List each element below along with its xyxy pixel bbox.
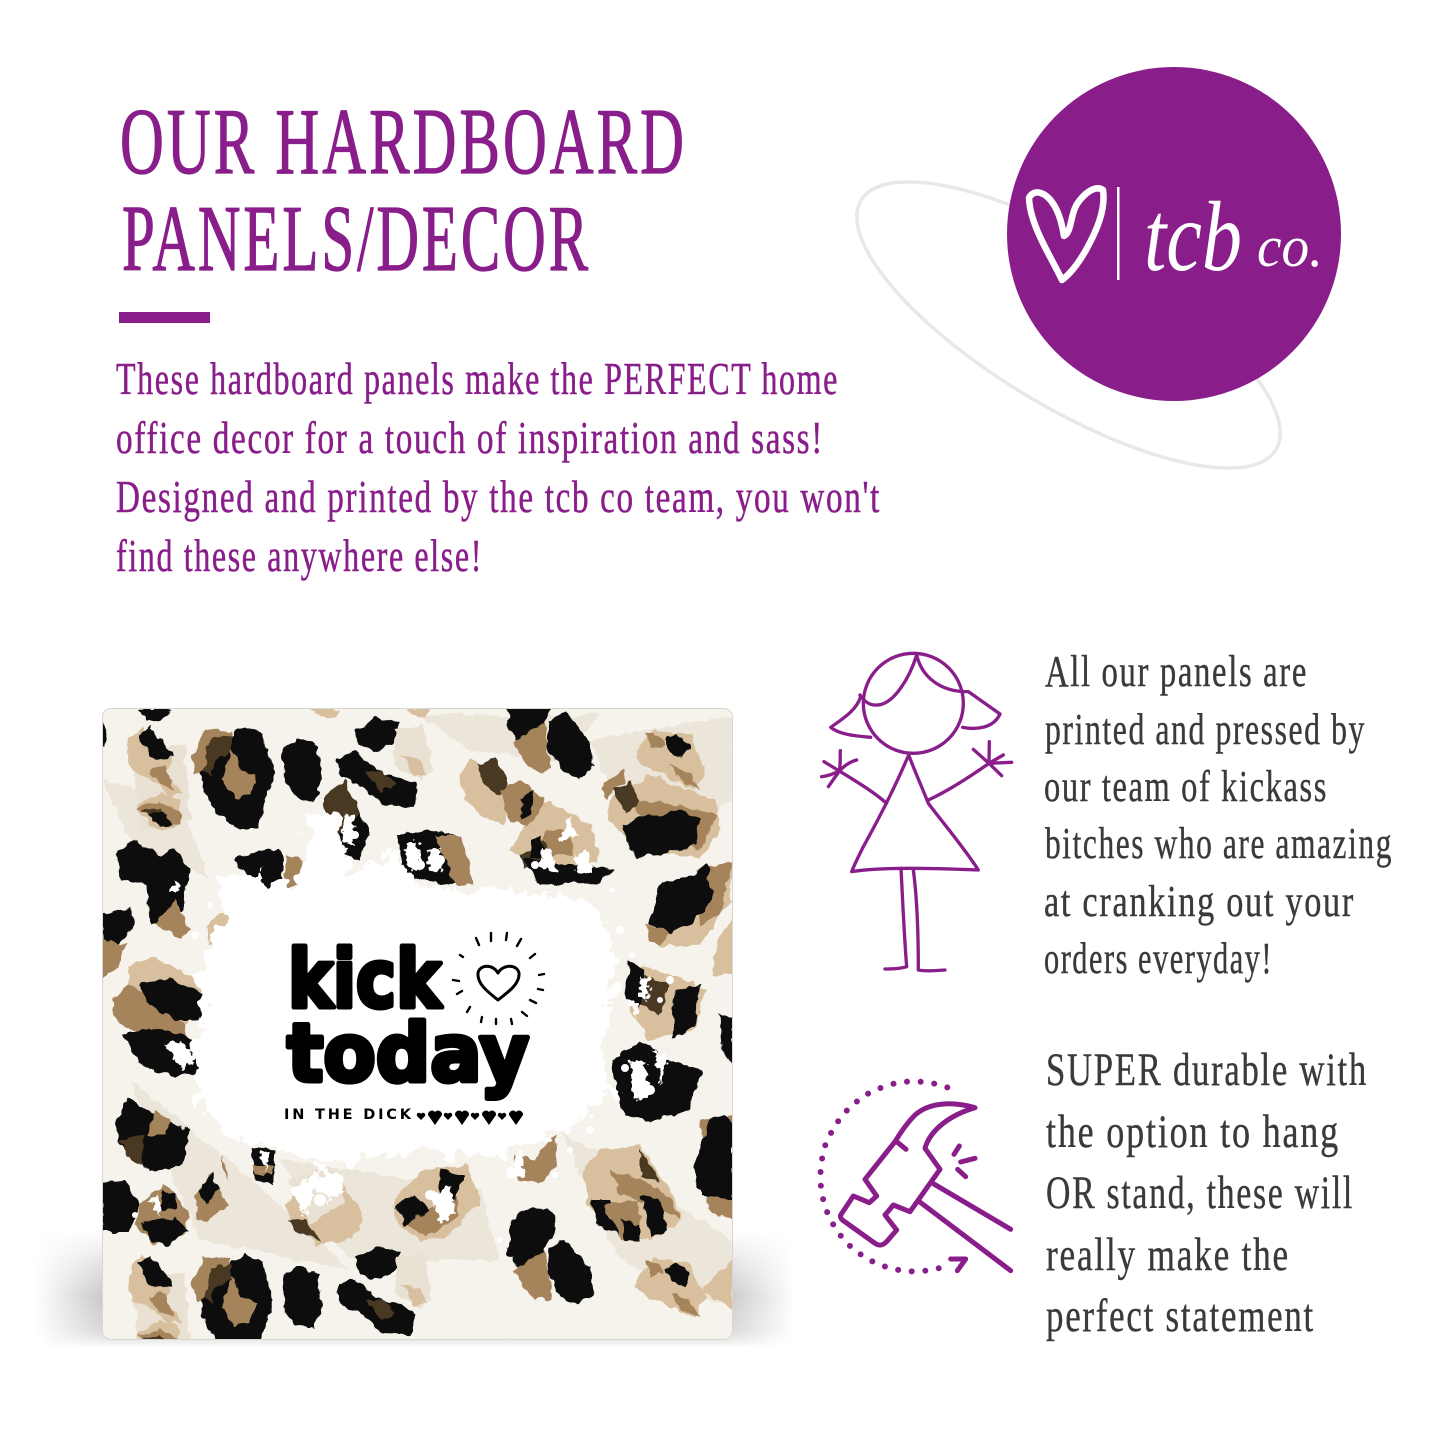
intro paragraph: find these anywhere else! — [116, 530, 483, 581]
title underline — [119, 312, 210, 323]
logo divider — [1117, 187, 1120, 280]
intro paragraph: These hardboard panels make the PERFECT home — [116, 353, 839, 404]
panel edge vignette — [102, 708, 733, 1340]
text block: printed and pressed: our team of kickass — [1044, 762, 1328, 811]
title — [120, 90, 687, 291]
text block: durability: perfect statement — [1046, 1290, 1315, 1342]
logo orbit ring — [819, 130, 1318, 520]
text block: printed and pressed — [1044, 647, 1393, 983]
leopard print pattern — [102, 680, 733, 1358]
icon: row of small hearts — [417, 1111, 523, 1125]
logo wordmark: tcb — [1144, 181, 1242, 292]
icon: stick figure girl — [822, 653, 1012, 971]
icon: logo heart — [1029, 188, 1104, 280]
text block: printed and pressed: All our panels are — [1045, 647, 1308, 696]
panel: leopard print hardboard — [102, 680, 733, 1358]
text block: printed and pressed: at cranking out your — [1044, 877, 1355, 926]
logo badge — [1007, 67, 1341, 401]
logo wordmark — [1144, 181, 1323, 292]
intro paragraph: Designed and printed by the tcb co team, you won't — [116, 471, 881, 522]
icon: outlined heart with rays — [453, 933, 544, 1024]
white paint splatter — [192, 812, 618, 1200]
text block: durability — [1046, 1044, 1368, 1342]
intro paragraph — [116, 353, 881, 581]
text block: printed and pressed: orders everyday! — [1044, 934, 1273, 983]
panel text: kick today — [284, 933, 529, 1123]
logo wordmark: co. — [1257, 214, 1323, 279]
white speckles over spots — [150, 812, 668, 1222]
panel text: kick today: IN THE DICK — [284, 1107, 412, 1123]
title: PANELS/DECOR — [122, 187, 591, 291]
product shadow — [46, 1240, 784, 1345]
icon: hammer with dotted arrow — [820, 1082, 1011, 1272]
intro paragraph: office decor for a touch of inspiration and sass! — [116, 412, 824, 463]
text block: durability: the option to hang — [1046, 1106, 1340, 1158]
title: OUR HARDBOARD — [120, 90, 687, 194]
panel text: kick today: today — [287, 1007, 529, 1100]
text block: durability: really make the — [1046, 1229, 1290, 1281]
panel text: kick today: kick — [288, 933, 443, 1026]
